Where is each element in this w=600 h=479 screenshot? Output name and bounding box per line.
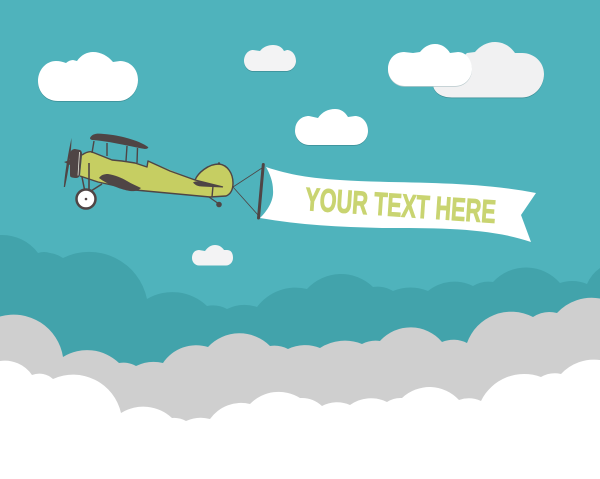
lower wing [99, 174, 141, 191]
aircraft body outline [80, 152, 233, 197]
wheel [76, 190, 96, 208]
cloud: top centre [244, 45, 296, 72]
banner text: YOUR TEXT HERE [304, 181, 497, 230]
cloud: large grey-white right [433, 42, 544, 98]
upper wing [90, 134, 148, 149]
banner pole [258, 164, 263, 218]
middle cloud layer: grey [0, 298, 600, 479]
tow wires [233, 168, 262, 215]
tail skid [209, 197, 222, 207]
biplane [64, 134, 233, 208]
aircraft body fill [80, 152, 233, 197]
propeller [64, 138, 72, 187]
front cloud layer: white [0, 360, 600, 479]
tailplane [193, 181, 223, 188]
cloud: middle [295, 109, 368, 146]
cowling highlight [78, 152, 80, 176]
banner with text [260, 167, 536, 242]
cloud: small lower [192, 245, 233, 266]
cloud: top left [38, 52, 138, 102]
banner ribbon [260, 167, 536, 242]
tail fin knob [218, 162, 220, 165]
wing struts [92, 141, 213, 197]
propeller hub [64, 160, 70, 165]
back cloud layer: dark teal [0, 235, 600, 400]
engine cowling [70, 149, 82, 178]
landing gear [82, 177, 102, 192]
cloud: white overlapping right [388, 44, 472, 87]
centre gear strut [88, 163, 90, 189]
